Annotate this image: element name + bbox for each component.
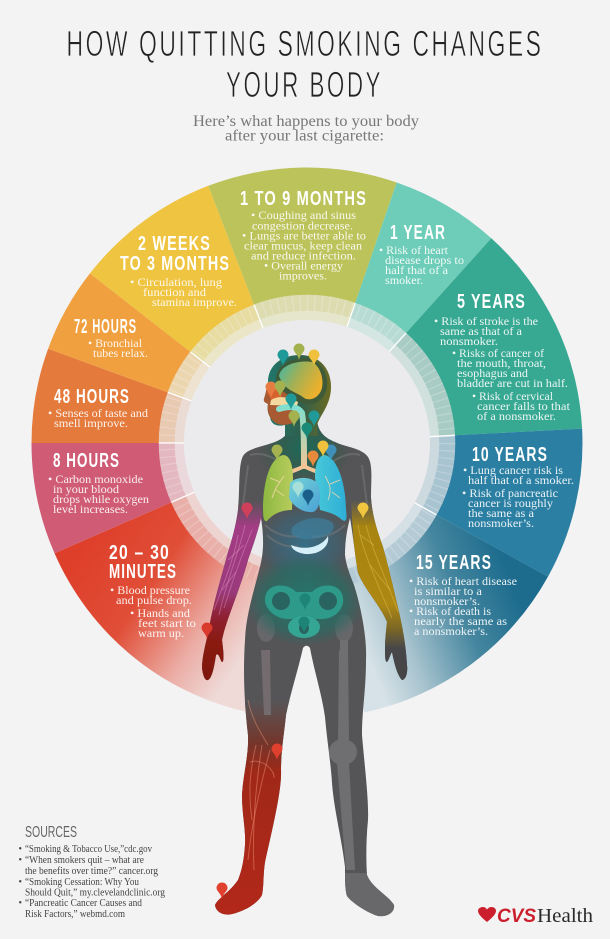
brain — [279, 362, 323, 399]
sources: “When smokers quit – what are — [25, 855, 145, 866]
text: 72 hours: tubes relax. — [93, 346, 148, 360]
bronchial branches — [270, 476, 340, 500]
text: 5 years: 5 YEARS — [457, 291, 526, 313]
face — [264, 385, 298, 425]
segment: 10 years — [436, 429, 582, 577]
sources — [18, 824, 165, 920]
human body figure — [195, 344, 415, 925]
text: 20 to 30 minutes: and pulse drop. — [116, 593, 192, 607]
text: 10 years: half that of a smoker. — [468, 473, 574, 487]
text: 20 to 30 minutes: warm up. — [138, 626, 184, 640]
text: 8 hours: in your blood — [53, 482, 119, 496]
text: 1 to 9 months: congestion decrease. — [252, 218, 353, 232]
text: 2 weeks to 3 months: TO 3 MONTHS — [120, 253, 230, 275]
text: 10 years: nonsmoker’s. — [468, 516, 534, 530]
text: 5 years: bladder are cut in half. — [457, 376, 568, 390]
location pins — [202, 344, 368, 899]
text: 2 weeks to 3 months: 2 WEEKS — [138, 233, 211, 255]
title: YOUR BODY — [226, 64, 383, 105]
text: 2 weeks to 3 months — [120, 233, 237, 309]
timeline wheel — [31, 168, 582, 712]
text: 5 years: • Risk of cervical — [472, 389, 554, 403]
pancreas — [291, 536, 328, 554]
CVS Health logo: CVS — [497, 906, 536, 927]
text: 1 year: • Risk of heart — [379, 243, 449, 257]
nasal cavity — [267, 384, 282, 401]
sources: the benefits over time?” cancer.org — [25, 866, 158, 877]
title — [66, 23, 544, 105]
text: 10 years — [462, 444, 574, 530]
text: 15 years: nearly the same as — [414, 614, 507, 628]
text: 15 years: nonsmoker’s. — [414, 594, 480, 608]
subtitle: Here’s what happens to your body — [193, 113, 419, 130]
inner disc — [184, 320, 430, 566]
torso tint — [250, 424, 360, 642]
text: 1 to 9 months: 1 TO 9 MONTHS — [240, 188, 367, 210]
head — [264, 355, 331, 436]
text: 10 years: 10 YEARS — [472, 444, 548, 466]
body silhouette — [202, 420, 407, 916]
text: 1 to 9 months: • Overall energy — [264, 258, 343, 272]
text: 5 years: the mouth, throat, — [457, 356, 546, 370]
text: 20 to 30 minutes: • Blood pressure — [110, 583, 190, 597]
text: 8 hours — [48, 450, 149, 516]
text: 20 to 30 minutes: • Hands and — [130, 606, 190, 620]
text: 72 hours — [74, 316, 148, 360]
text: 2 weeks to 3 months: stamina improve. — [152, 295, 237, 309]
trachea and bronchi — [279, 407, 325, 476]
text: 8 hours: level increases. — [53, 502, 128, 516]
text: 20 to 30 minutes — [109, 542, 196, 640]
right lung — [315, 455, 347, 521]
sources: • — [18, 898, 22, 909]
text: 20 to 30 minutes: 20 – 30 — [109, 542, 170, 564]
left leg — [215, 700, 290, 915]
segment: 5 years — [406, 238, 582, 435]
sources: Should Quit,” my.clevelandclinic.org — [25, 888, 165, 898]
text: 5 years: of a nonsmoker. — [477, 409, 556, 423]
right arm — [352, 500, 408, 680]
text: 48 hours: • Senses of taste and — [48, 406, 148, 420]
segment: 8 hours — [31, 443, 171, 553]
sources: • — [18, 855, 22, 866]
text: 1 to 9 months: improves. — [279, 268, 327, 282]
head inner ring — [276, 358, 327, 404]
left arm — [202, 500, 262, 680]
left lung — [263, 455, 293, 521]
text: 48 hours: 48 HOURS — [54, 386, 130, 408]
text: 5 years — [434, 291, 571, 423]
sources: “Smoking Cessation: Why You — [25, 877, 139, 888]
segment: 1 year — [355, 182, 491, 333]
text: 20 to 30 minutes: MINUTES — [109, 561, 177, 583]
segment: 15 years — [338, 515, 548, 712]
text: 48 hours — [48, 386, 148, 430]
text: 10 years: the same as a — [468, 506, 535, 520]
segment: 72 hours — [48, 273, 190, 392]
CVS Health logo: Health — [537, 905, 593, 927]
sources: “Smoking & Tobacco Use,”cdc.gov — [25, 844, 152, 855]
text: 10 years: cancer is roughly — [468, 496, 553, 510]
subtitle: after your last cigarette: — [225, 128, 384, 144]
text: 48 hours: smell improve. — [54, 416, 128, 430]
text: 1 year: half that of a — [385, 263, 449, 277]
text: 5 years: esophagus and — [457, 366, 528, 380]
text: 1 to 9 months — [240, 188, 367, 282]
bones — [257, 614, 400, 920]
text: 15 years: 15 YEARS — [416, 552, 492, 574]
text: 15 years: • Risk of death is — [409, 604, 491, 618]
text: 5 years: • Risk of stroke is the — [434, 314, 538, 328]
text: 5 years: same as that of a — [440, 324, 523, 338]
text: 1 to 9 months: • Lungs are better able to — [242, 228, 366, 242]
text: 15 years — [409, 552, 517, 638]
text: 20 to 30 minutes: feet start to — [138, 616, 196, 630]
text: 1 to 9 months: and reduce infection. — [251, 248, 356, 262]
text: 2 weeks to 3 months: • Circulation, lung — [130, 275, 222, 289]
sources: Risk Factors,” webmd.com — [25, 909, 125, 920]
text: 10 years: • Risk of pancreatic — [462, 486, 558, 500]
text: 15 years: • Risk of heart disease — [409, 574, 517, 588]
segment: 20 to 30 minutes — [54, 502, 274, 712]
text: 5 years: nonsmoker. — [440, 334, 498, 348]
segment: 48 hours — [31, 349, 168, 443]
pelvis — [265, 585, 343, 638]
stomach — [291, 518, 334, 539]
text: 8 hours: • Carbon monoxide — [48, 472, 143, 486]
sources: SOURCES — [25, 824, 77, 841]
text: 5 years: • Risks of cancer of — [452, 346, 544, 360]
text: 1 year: disease drops to — [385, 253, 464, 267]
sources: • — [18, 877, 22, 888]
shoulders and ribs — [243, 454, 367, 547]
text: 8 hours: drops while oxygen — [53, 492, 149, 506]
text: 10 years: • Lung cancer risk is — [463, 463, 563, 477]
sources: “Pancreatic Cancer Causes and — [25, 898, 142, 909]
text: 15 years: is similar to a — [414, 584, 483, 598]
tick ring — [109, 245, 505, 641]
text: 72 hours: 72 HOURS — [74, 316, 137, 338]
sources: • — [18, 844, 22, 855]
text: 2 weeks to 3 months: function and — [143, 285, 206, 299]
segment: 2 weeks to 3 months — [90, 186, 254, 352]
CVS Health logo — [478, 905, 593, 927]
segment: 1 to 9 months — [208, 168, 397, 305]
mouth and palate — [270, 397, 298, 406]
text: 8 hours: 8 HOURS — [53, 450, 120, 472]
text: 1 year: 1 YEAR — [390, 222, 446, 244]
text: 15 years: a nonsmoker’s. — [414, 624, 488, 638]
heart — [289, 478, 320, 512]
text: 5 years: cancer falls to that — [477, 399, 571, 413]
text: 1 to 9 months: • Coughing and sinus — [251, 208, 356, 222]
text: 1 year: smoker. — [385, 273, 423, 287]
ring separators — [159, 303, 455, 515]
text: 1 to 9 months: clear mucus, keep clean — [244, 238, 362, 252]
subtitle — [193, 113, 419, 144]
text: 72 hours: • Bronchial — [88, 336, 143, 350]
text: 1 year — [379, 222, 464, 287]
